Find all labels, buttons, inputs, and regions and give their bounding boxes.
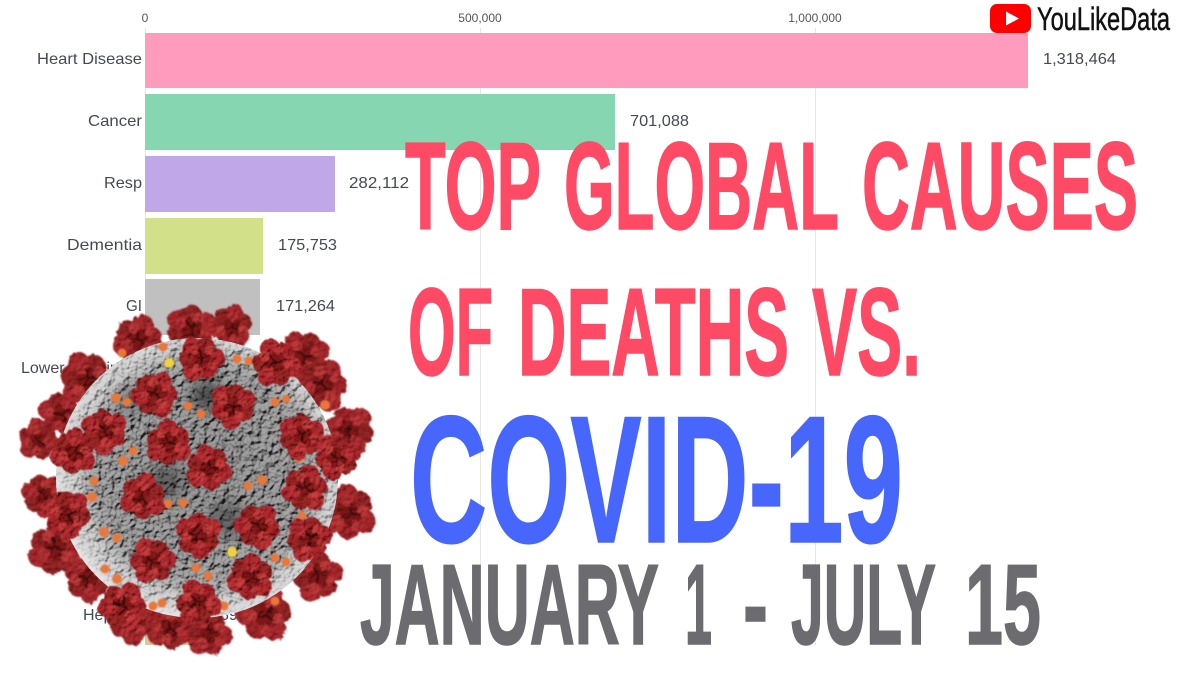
icon: YouTube play button	[990, 4, 1031, 33]
title: of deaths vs.	[408, 264, 921, 402]
bar: Lower Respiratory	[21, 360, 331, 377]
subtitle: date range: JANUARY	[360, 542, 659, 669]
bar: Heart Disease	[37, 33, 1116, 88]
logo: YouLikeData	[990, 1, 1170, 37]
bar: Resp	[104, 156, 409, 212]
virus illustration	[9, 297, 387, 660]
bar: Dementia: 175,753	[278, 237, 337, 254]
axis ticks: 0	[142, 11, 149, 25]
bar: Lower Respiratory: 168,371	[273, 360, 331, 377]
textured sphere	[56, 338, 338, 618]
bar: Dementia	[67, 218, 337, 274]
subtitle: date range: 15	[965, 542, 1041, 669]
outer spikes behind the sphere	[9, 297, 387, 660]
bar: Hepatitis: 89,530	[220, 607, 269, 624]
title: of deaths vs.: VS.	[812, 264, 921, 402]
bar: GI	[126, 279, 335, 335]
title: of deaths vs.: DEATHS	[518, 264, 789, 402]
title: top global causes: TOP	[405, 118, 541, 256]
axis ticks: 500,000	[458, 11, 502, 25]
bar: Lower Respiratory: Lower Respiratory	[21, 360, 151, 377]
subtitle: date range: 1	[685, 542, 712, 669]
bar: Cancer: Cancer	[88, 113, 143, 130]
bar: Heart Disease: Heart Disease	[37, 51, 142, 68]
bar: Cancer: 701,088	[630, 113, 689, 130]
bar: Dementia: Dementia	[67, 237, 142, 254]
orange and yellow surface dots	[87, 342, 330, 610]
title: of deaths vs.: OF	[408, 264, 493, 402]
axis ticks: 1,000,000	[788, 11, 842, 25]
bar: Resp: Resp	[104, 175, 142, 192]
bar: Resp: 282,112	[349, 175, 409, 192]
bar: Cancer	[88, 94, 689, 150]
subtitle: date range: JULY	[791, 542, 936, 669]
front spikes on the sphere	[40, 331, 365, 638]
bar: GI: 171,264	[276, 298, 335, 315]
axis ticks	[142, 11, 842, 645]
bar: Hepatitis	[83, 589, 269, 645]
bar: Heart Disease: 1,318,464	[1043, 51, 1116, 68]
bar: GI: GI	[126, 298, 142, 315]
subtitle: date range: -	[743, 542, 768, 669]
bar: Hepatitis: Hepatitis	[83, 607, 145, 624]
title: top global causes: GLOBAL	[564, 118, 839, 256]
